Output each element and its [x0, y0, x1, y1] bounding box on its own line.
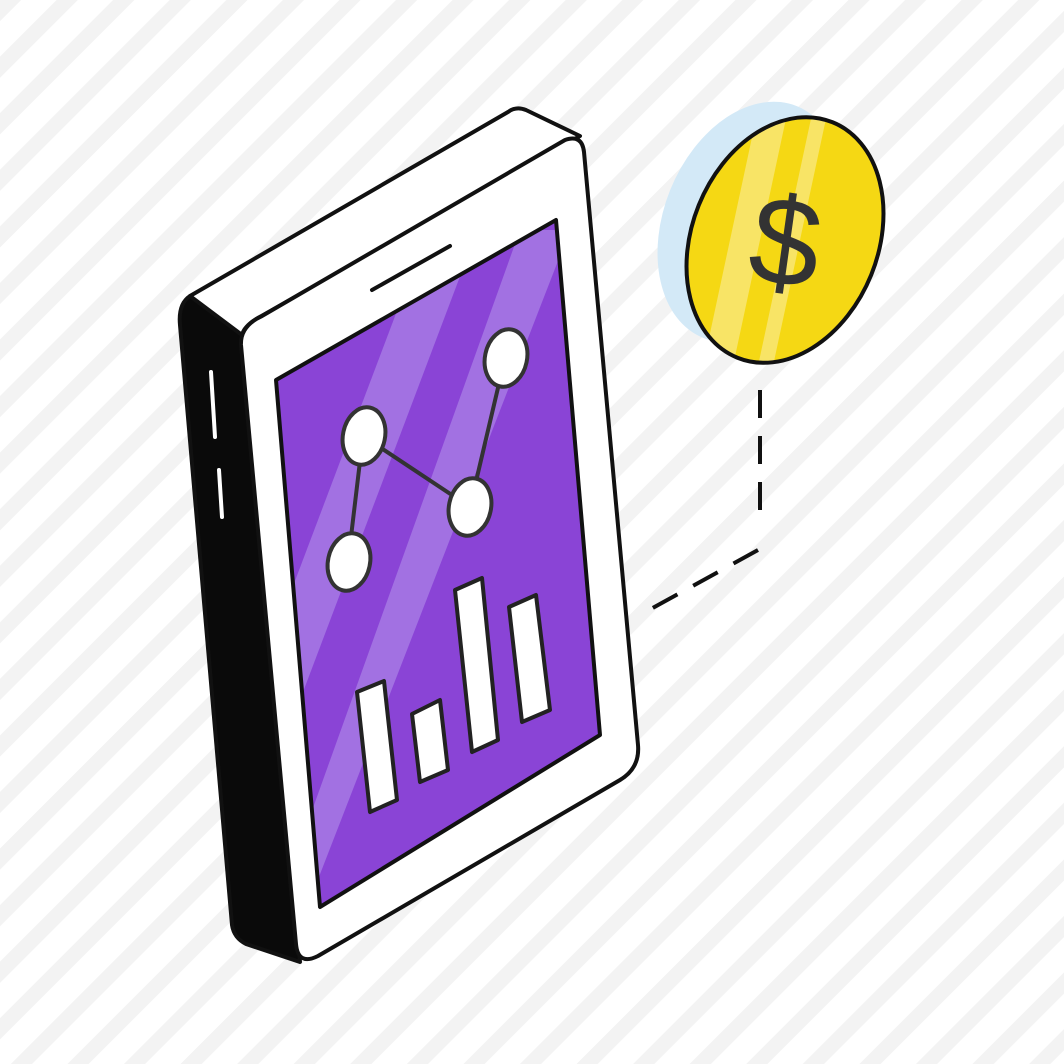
screen: [250, 220, 600, 907]
bar chart: [357, 578, 550, 812]
coin: [658, 102, 886, 365]
phone front face: [241, 138, 638, 959]
phone top face: [190, 108, 580, 335]
speaker line: [372, 246, 450, 290]
phone body: [180, 108, 638, 962]
network chart: [322, 325, 533, 595]
connector dashed line: [640, 390, 760, 615]
dollar sign: $: [742, 169, 830, 316]
phone side face: [180, 296, 300, 962]
side buttons: [211, 372, 222, 517]
